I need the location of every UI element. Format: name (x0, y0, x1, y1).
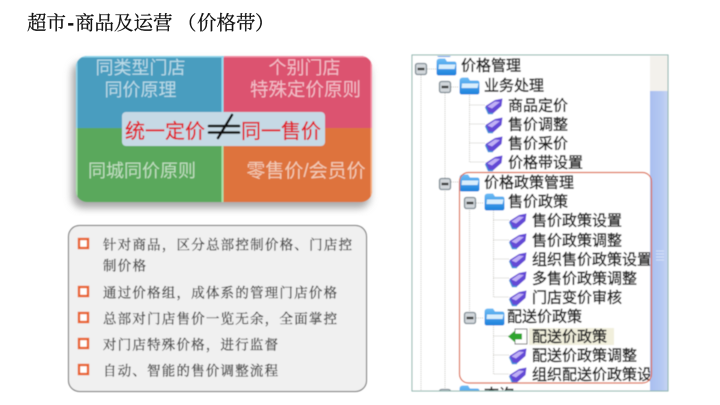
title: - (68, 12, 74, 34)
quadrant: same-type stores: 同价原理 (104, 80, 176, 100)
leaf: price sourcing: 售价采价 (508, 136, 568, 152)
quadrant: same-city pricing: 同城同价原则 (88, 161, 196, 181)
branch: business processing (440, 78, 544, 94)
root: price management: 价格管理 (461, 58, 521, 74)
quadrant fills (76, 56, 372, 202)
leaf: policy settings: 售价政策设置 (532, 212, 622, 230)
quadrant: individual stores: 特殊定价原则 (250, 79, 361, 100)
leaf: multi-price policy adjustment: 多售价政策调整 (532, 270, 637, 288)
scrollbar (650, 56, 668, 391)
bullet item 3: 总部对门店售价一览无余，全面掌控 (103, 310, 337, 328)
panel: feature list (68, 226, 366, 392)
quadrant: same-type stores (96, 58, 186, 100)
leaf: policy adjustment: 售价政策调整 (532, 232, 622, 250)
bullet item 1 (79, 236, 352, 274)
leaf: product pricing: 商品定价 (508, 98, 568, 114)
frame top folder fragment (436, 55, 451, 58)
quadrant: individual stores: 个别门店 (268, 58, 340, 78)
tree content (414, 55, 651, 392)
leaf: organization policy settings: 组织售价政策设置 (532, 252, 652, 268)
quadrant: retail and member price: 零售价/会员价 (246, 160, 366, 182)
branch: business processing: 业务处理 (484, 78, 544, 94)
branch: distribution price policy: 配送价政策 (507, 308, 582, 326)
bullet item 5: 自动、智能的售价调整流程 (103, 362, 279, 378)
leaf: selected distribution policy: 配送价政策 (532, 328, 607, 346)
title: ） (255, 12, 275, 34)
title: （ (177, 12, 197, 34)
label: same selling price: 同一售价 (241, 120, 321, 143)
branch: price policy management: 价格政策管理 (484, 174, 574, 192)
bullet item 1: 制价格 (103, 258, 146, 274)
bullet item 1: 针对商品，区分总部控制价格、门店控 (103, 236, 352, 254)
center label (122, 112, 325, 146)
title: 价格带 (197, 12, 256, 34)
bullet item 2: 通过价格组，成体系的管理门店价格 (103, 284, 337, 302)
bullet item 4: 对门店特殊价格，进行监督 (103, 336, 278, 354)
panel: pricing quadrants (72, 56, 372, 208)
panel shadow (72, 62, 370, 208)
leaf: store price change review: 门店变价审核 (532, 290, 622, 306)
not-equal sign (209, 115, 239, 138)
quadrant: same-type stores: 同类型门店 (96, 58, 186, 78)
leaf: price band settings: 价格带设置 (508, 154, 583, 172)
branch: distribution price policy (464, 308, 582, 326)
panel: menu tree screenshot (412, 50, 668, 404)
screenshot frame (412, 55, 668, 391)
selected row highlight (529, 328, 614, 345)
leaf: organization distribution policy: 组织配送价政策设置 (532, 366, 667, 384)
branch: price policy management (440, 174, 574, 192)
label: unified pricing: 统一定价 (125, 120, 205, 143)
branch: query: 查询 (484, 386, 514, 404)
branch: selling price policy: 售价政策 (508, 194, 568, 210)
root: price management (416, 58, 521, 76)
title: 超市 (27, 12, 66, 34)
quadrant: individual stores (250, 58, 361, 100)
leaf: price adjustment: 售价调整 (508, 116, 568, 134)
title: 商品及运营 (75, 12, 173, 34)
red highlight outline (460, 172, 652, 383)
leaf: distribution policy adjustment: 配送价政策调整 (532, 348, 637, 364)
branch: selling price policy (464, 194, 568, 210)
branch: query (438, 385, 514, 392)
